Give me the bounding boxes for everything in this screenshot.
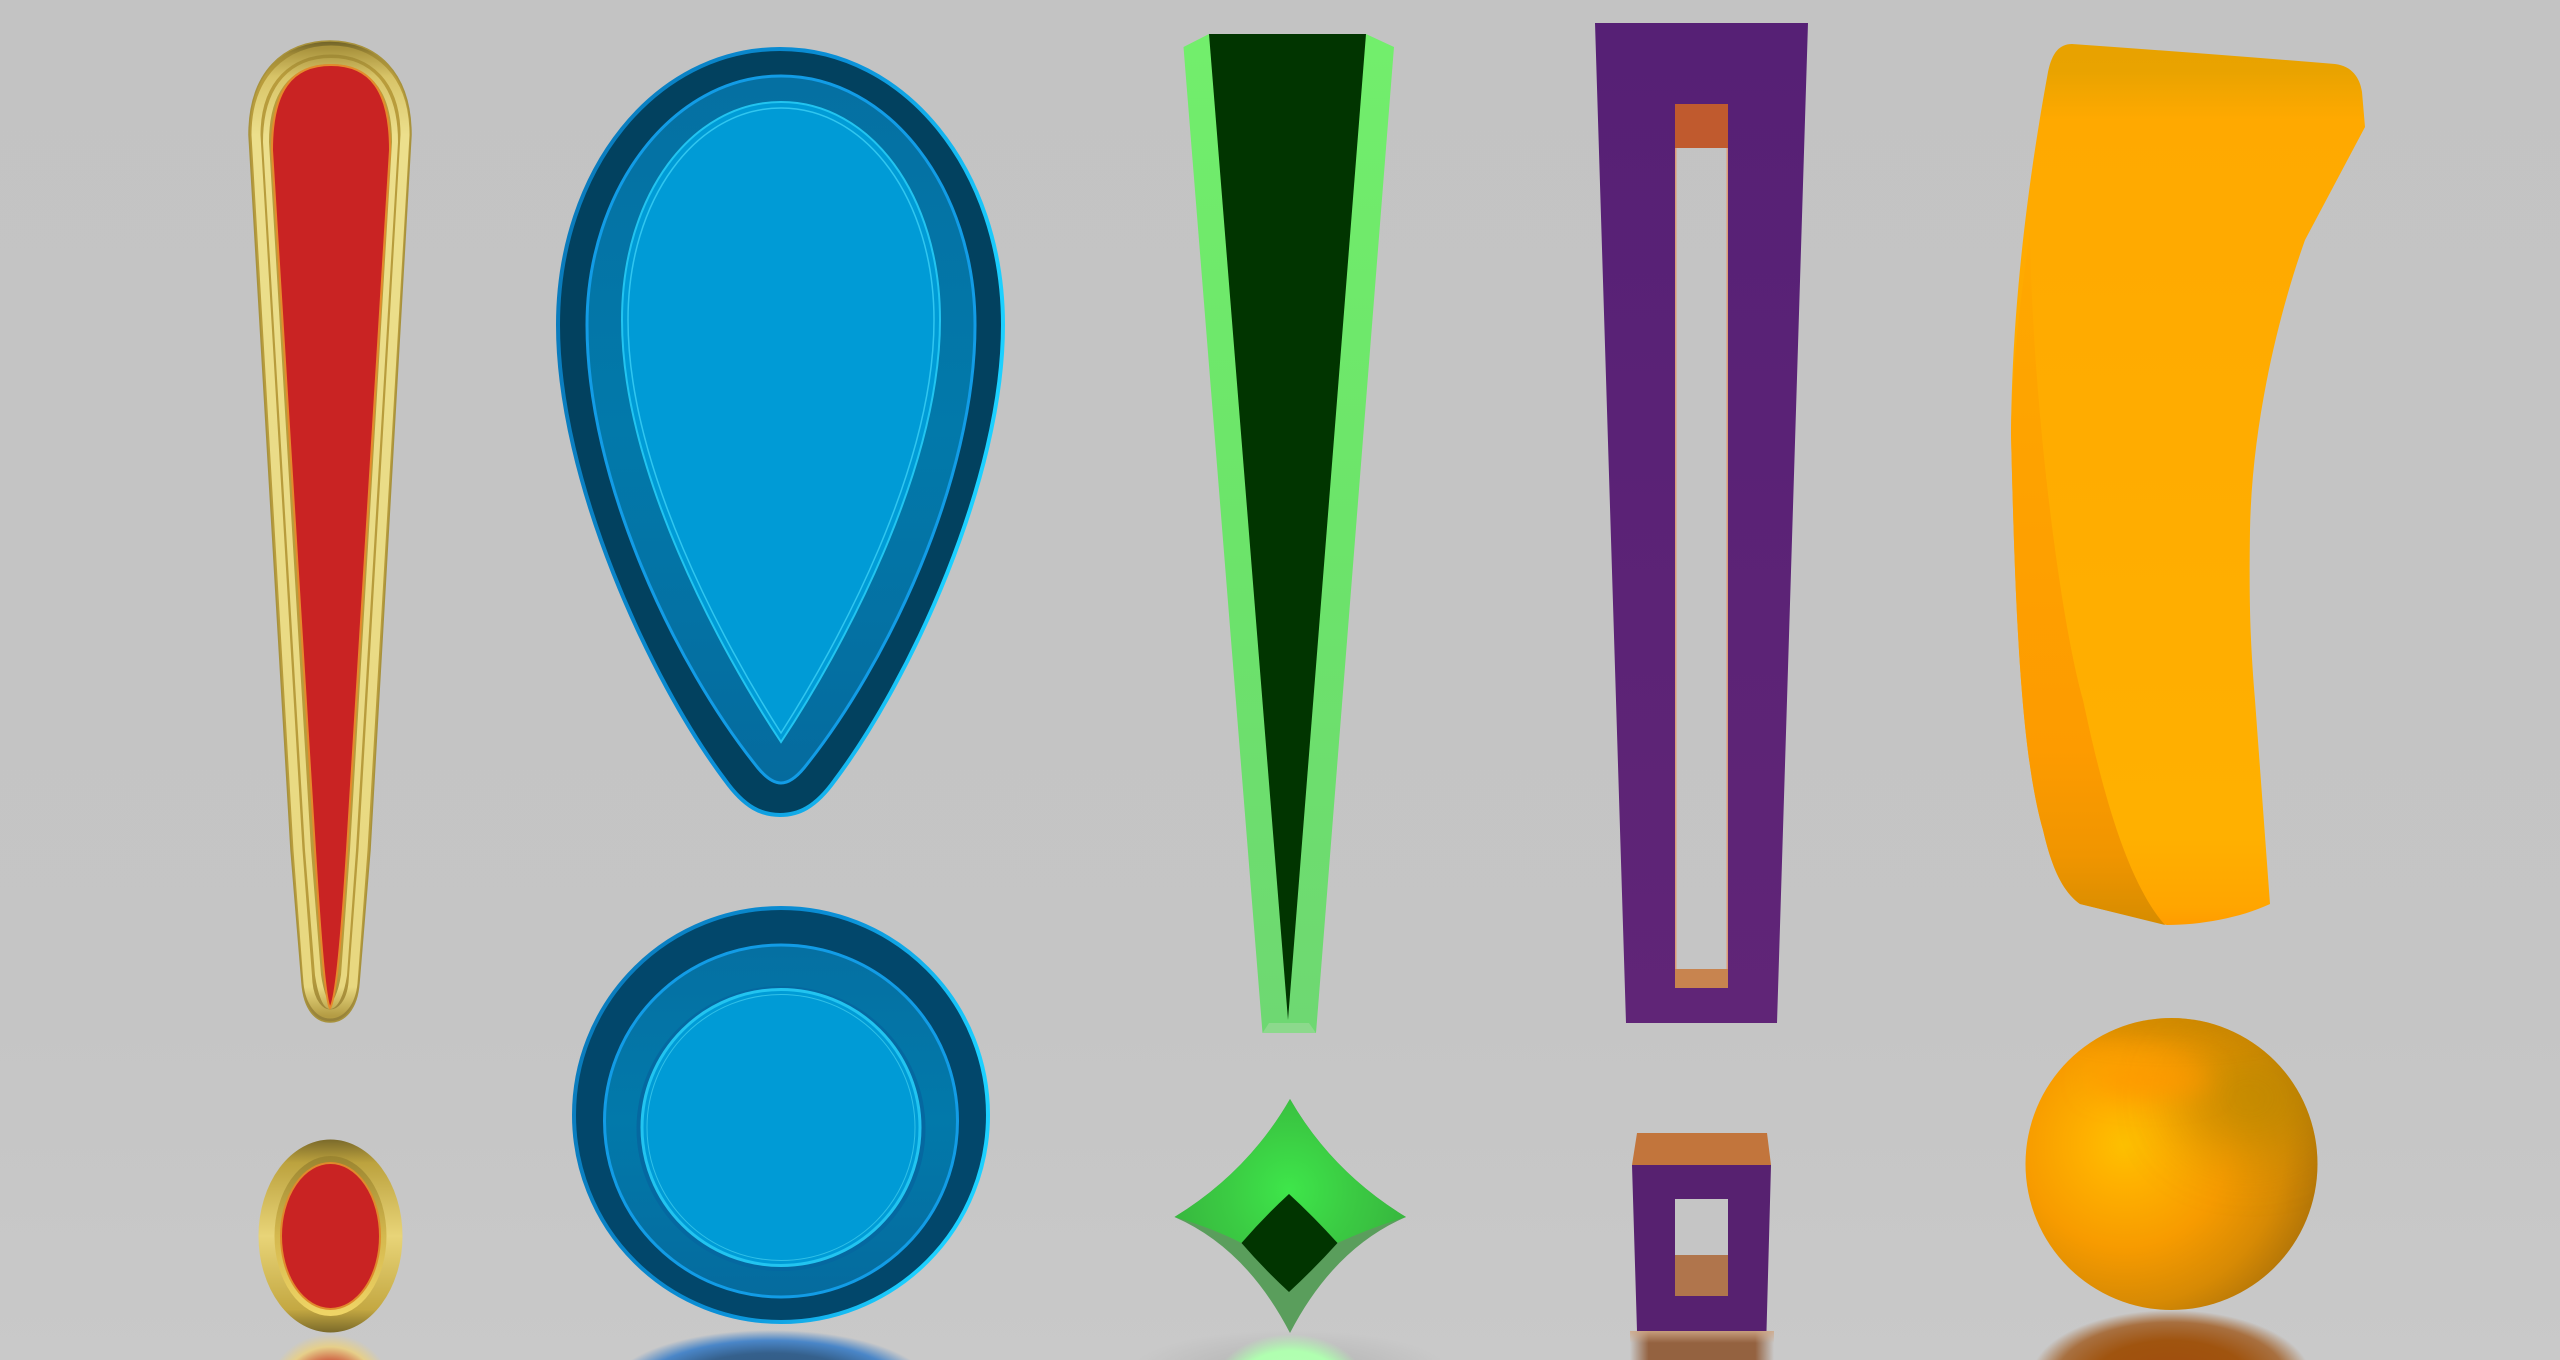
gold bar with red inlay xyxy=(249,41,411,1022)
floor reflection xyxy=(611,1330,931,1360)
green tapered bar xyxy=(1184,34,1394,1033)
exclamation mark 1: red and gold xyxy=(249,41,411,1360)
blue round dot xyxy=(574,908,988,1322)
floor reflection xyxy=(1630,1331,1774,1360)
orange sphere dot xyxy=(2026,1008,2320,1310)
gold dot with red inlay xyxy=(258,1140,402,1332)
green diamond dot xyxy=(1174,1099,1406,1333)
floor shadow and reflection xyxy=(1130,1330,1450,1360)
exclamation mark 5: orange xyxy=(2011,44,2365,1360)
floor reflection xyxy=(268,1334,392,1360)
exclamation mark 3: green xyxy=(1130,34,1450,1360)
orange curved bar xyxy=(2011,44,2365,925)
exclamation mark 2: blue xyxy=(558,49,1003,1360)
exclamation mark 4: purple xyxy=(1595,23,1808,1360)
purple block dot xyxy=(1632,1133,1771,1331)
blue teardrop bar xyxy=(558,49,1003,815)
floor reflection xyxy=(2031,1310,2311,1360)
purple bar with slot xyxy=(1595,23,1808,1023)
